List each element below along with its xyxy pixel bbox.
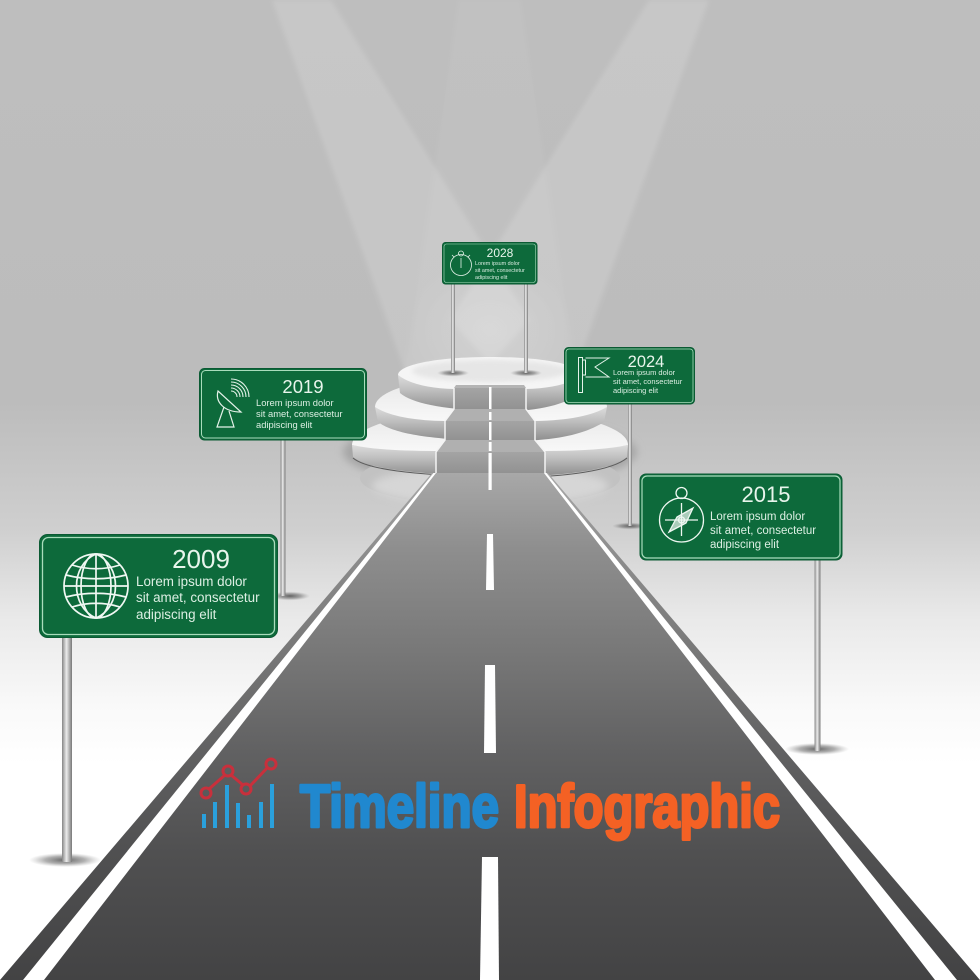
sign: 2015: adipiscing elit [710, 539, 780, 551]
sign: 2028 [437, 242, 542, 376]
road edge lines [23, 473, 436, 980]
icon: growth chart [201, 759, 276, 828]
sign: 2009 [29, 534, 278, 867]
icon: globe [64, 554, 128, 618]
poles [437, 284, 542, 376]
center dashes [480, 387, 499, 980]
sign: 2028: sit amet, consectetur [475, 268, 525, 274]
sign: 2019: sit amet, consectetur [256, 408, 342, 419]
road [0, 387, 980, 980]
sign: 2019: Lorem ipsum dolor [256, 397, 334, 408]
sign: 2024: 2024 [628, 353, 664, 371]
sign: 2028: Lorem ipsum dolor [475, 261, 520, 267]
sign: 2009: Lorem ipsum dolor [136, 574, 247, 589]
pole [612, 404, 648, 530]
sign: 2024: sit amet, consectetur [613, 377, 683, 386]
sign: 2024: adipiscing elit [613, 386, 659, 395]
icon: satellite dish [217, 379, 249, 427]
sign: 2019 [200, 368, 366, 600]
icon: stopwatch [450, 251, 472, 276]
podium [343, 357, 637, 506]
title text: Timeline [300, 773, 499, 840]
icon: compass [660, 488, 704, 542]
sign: 2009: adipiscing elit [136, 607, 217, 622]
sign: 2015: sit amet, consectetur [710, 525, 816, 537]
sign: 2024: Lorem ipsum dolor [613, 368, 676, 377]
icon: flag [578, 358, 609, 392]
title text [300, 773, 780, 840]
title logo [201, 759, 780, 840]
sign: 2015 [640, 474, 849, 755]
sign: 2019: 2019 [282, 376, 324, 397]
sign: 2028: adipiscing elit [475, 275, 508, 281]
sign: 2015: Lorem ipsum dolor [710, 511, 805, 523]
pole [270, 440, 310, 600]
pole [29, 636, 101, 867]
sign: 2028: 2028 [487, 246, 514, 260]
middle tier [375, 376, 607, 441]
sign: 2015: 2015 [742, 482, 790, 507]
title text: Infographic [514, 773, 780, 840]
stair road [436, 385, 545, 473]
sign: 2009: 2009 [172, 544, 230, 574]
pole [785, 560, 849, 755]
sign: 2019: adipiscing elit [256, 419, 313, 430]
spotlight beams [272, 0, 709, 400]
top tier [398, 357, 582, 411]
sign: 2024 [564, 348, 694, 530]
podium reflection [343, 418, 637, 506]
bottom tier [352, 410, 628, 477]
sign: 2009: sit amet, consectetur [136, 590, 260, 605]
